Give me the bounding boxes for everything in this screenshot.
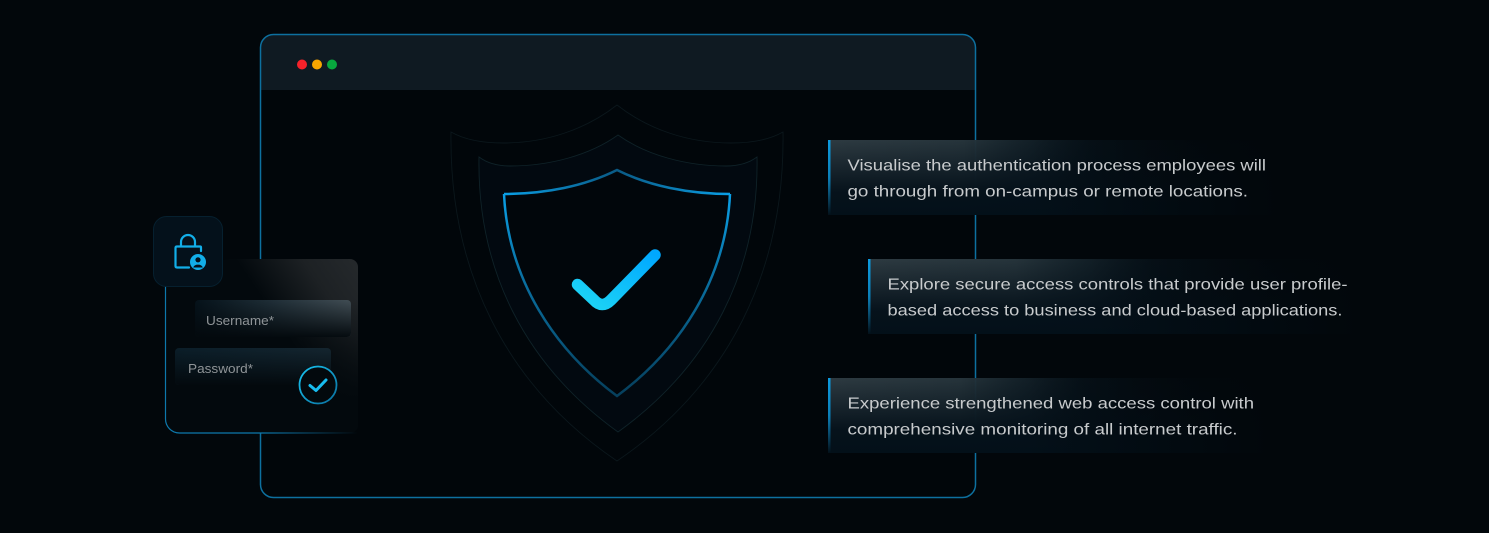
callout 2 text: based access to business and cloud-based applications.	[888, 302, 1342, 320]
callout 1	[828, 140, 1278, 215]
browser window	[260, 34, 976, 498]
callout 1 background	[828, 140, 1278, 215]
username field	[195, 300, 351, 337]
login card	[166, 259, 358, 433]
lock tile	[154, 216, 222, 286]
callout 3 text: Experience strengthened web access control with	[848, 396, 1254, 412]
shield inner outline	[504, 170, 730, 396]
callout 2 accent bar	[868, 259, 870, 334]
window outline	[260, 34, 976, 498]
password field	[175, 348, 331, 385]
card border	[166, 270, 358, 433]
shield check mark	[578, 255, 655, 304]
icon: user lock	[176, 235, 206, 270]
callout 3	[828, 378, 1268, 453]
security shield	[451, 105, 783, 461]
shield outer ring	[451, 105, 783, 461]
window title bar	[261, 35, 975, 90]
callout 3 background	[828, 378, 1268, 453]
password field: Password*	[188, 361, 253, 376]
callout 2 text: Explore secure access controls that provide user profile-	[888, 276, 1348, 294]
callout 3 text: comprehensive monitoring of all internet traffic.	[848, 422, 1238, 438]
window traffic lights	[297, 60, 337, 70]
callout 2	[868, 259, 1358, 334]
callout 1 accent bar	[828, 140, 830, 215]
verified check badge	[300, 366, 336, 404]
callout 3 accent bar	[828, 378, 830, 453]
username field: Username*	[206, 313, 274, 328]
shield middle ring	[479, 135, 757, 432]
callout 2 background	[868, 259, 1358, 334]
callout 1 text: go through from on-campus or remote locations.	[848, 184, 1248, 200]
callout 1 text: Visualise the authentication process employees will	[848, 158, 1266, 174]
card panel	[166, 259, 358, 433]
